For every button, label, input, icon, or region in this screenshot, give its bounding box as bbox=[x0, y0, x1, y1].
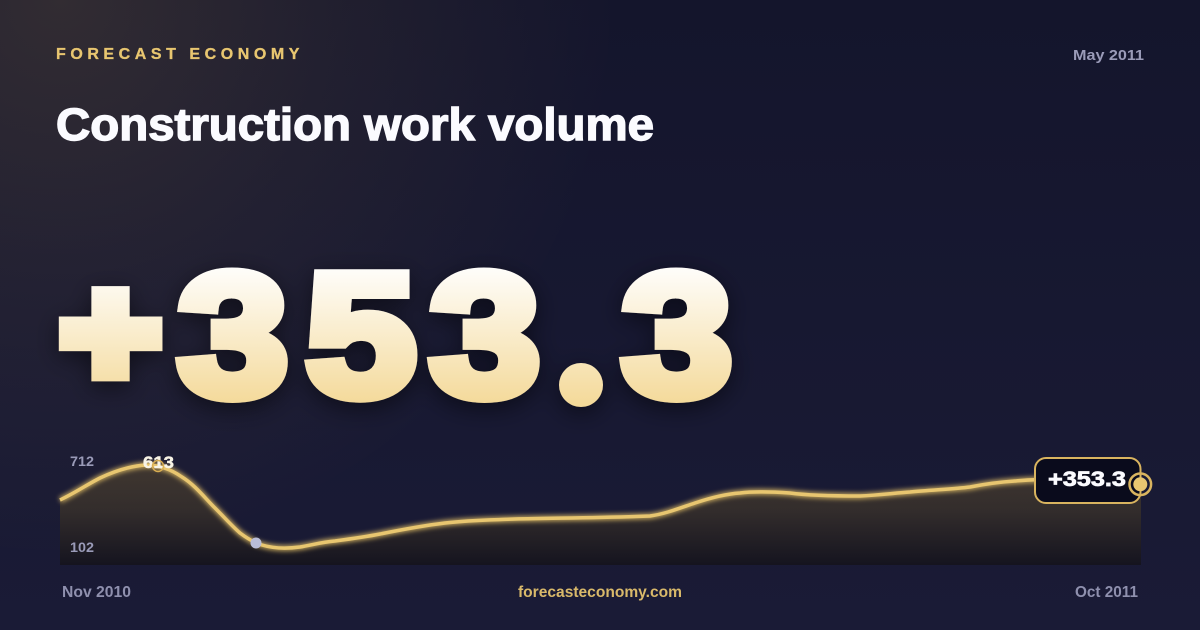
line chart bbox=[60, 453, 1151, 565]
headline value bbox=[62, 237, 732, 432]
end date label: Oct 2011 bbox=[1075, 584, 1138, 601]
end marker bbox=[1130, 474, 1151, 495]
chart line glow bbox=[60, 465, 1140, 548]
headline value: + bbox=[62, 246, 159, 417]
brand label: FORECAST ECONOMY bbox=[56, 46, 304, 63]
peak marker bbox=[152, 460, 164, 472]
low marker bbox=[250, 538, 262, 548]
end value badge bbox=[1035, 458, 1140, 503]
chart line bbox=[60, 465, 1140, 548]
start date label: Nov 2010 bbox=[62, 584, 131, 601]
chart area fill bbox=[60, 465, 1141, 565]
axis max label: 712 bbox=[70, 453, 94, 469]
peak label: 613 bbox=[143, 454, 174, 472]
headline value: 3 bbox=[622, 237, 732, 432]
headline value: 3 bbox=[178, 237, 288, 432]
date: May 2011 bbox=[1073, 47, 1144, 64]
title: Construction work volume bbox=[56, 99, 654, 150]
end value badge: +353.3 bbox=[1048, 468, 1126, 491]
axis min label: 102 bbox=[70, 539, 94, 555]
headline value: 3 bbox=[430, 237, 540, 432]
source website: forecasteconomy.com bbox=[518, 584, 682, 601]
headline value: 5 bbox=[306, 237, 416, 432]
